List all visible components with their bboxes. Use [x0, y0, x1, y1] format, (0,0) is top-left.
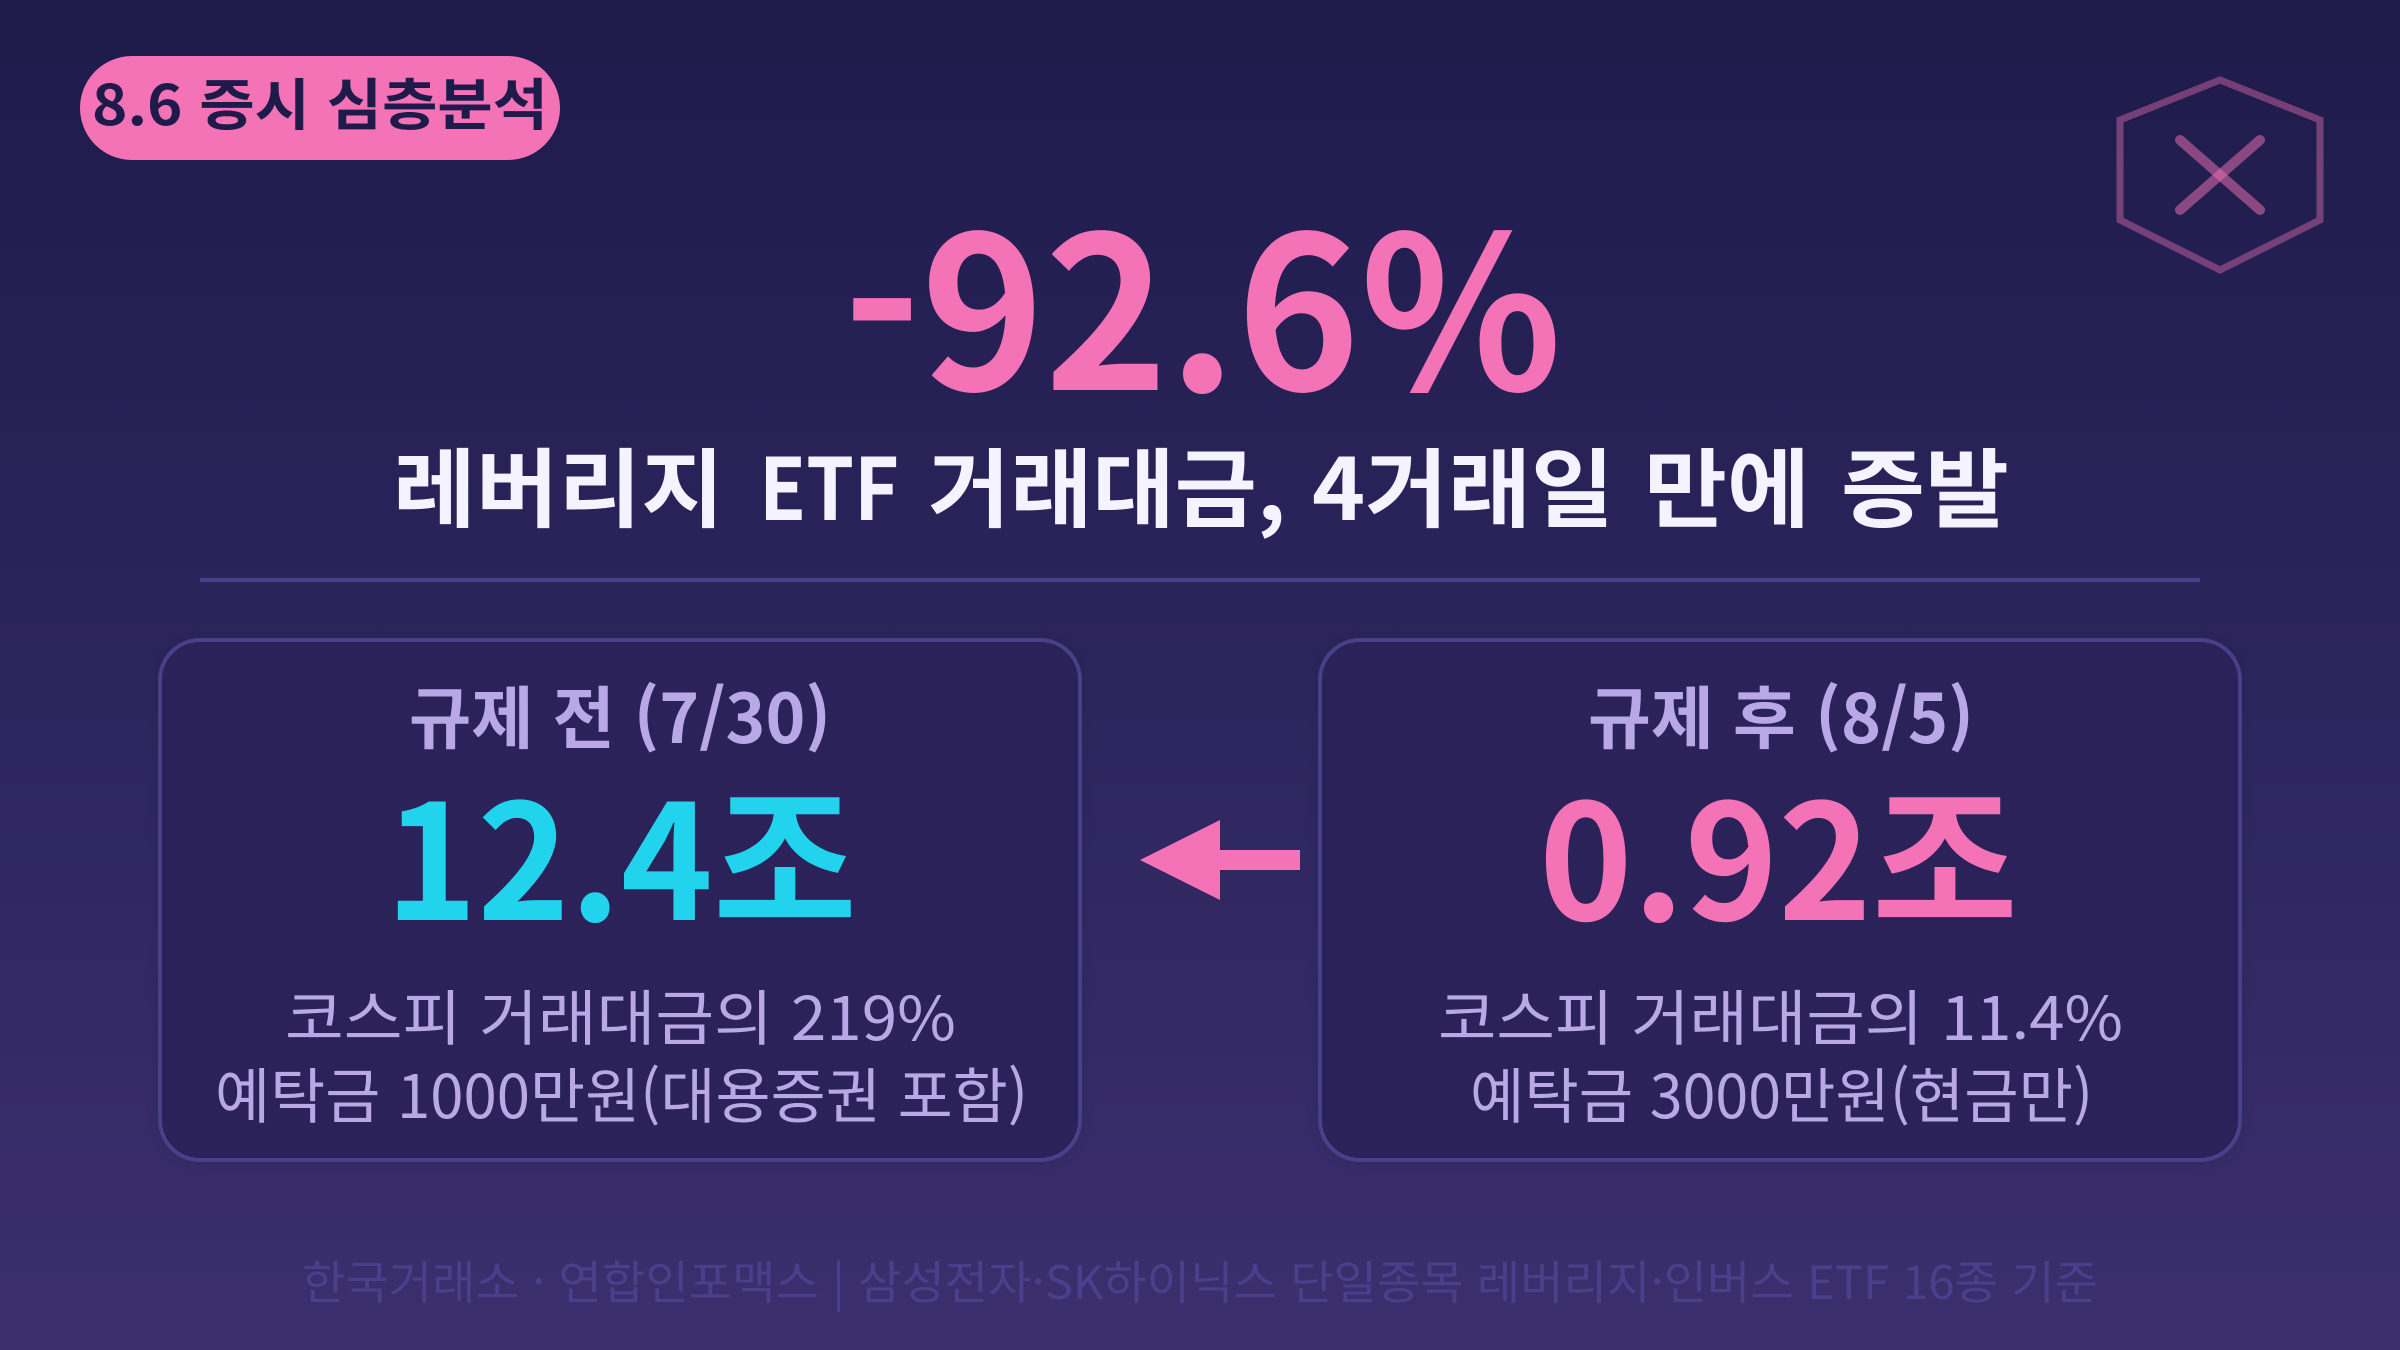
after deposit requirement: 예탁금 3000만원(현금만) — [1470, 1049, 2093, 1136]
source footnote: 한국거래소 · 연합인포맥스 | 삼성전자·SK하이닉스 단일종목 레버리지·인버스 ETF 16종 기준 — [302, 1247, 2098, 1313]
before share of KOSPI turnover: 코스피 거래대금의 219% — [285, 971, 956, 1058]
after share of KOSPI turnover: 코스피 거래대금의 11.4% — [1438, 971, 2123, 1058]
subtitle: ETF — [759, 420, 899, 545]
subtitle: 거래대금, — [928, 420, 1286, 545]
before heading: 규제 전 (7/30) — [409, 664, 831, 763]
panel: after regulation — [1320, 640, 2240, 1160]
subtitle: 증발 — [1841, 420, 2009, 545]
subtitle: 레버리지 — [393, 420, 724, 545]
after heading: 규제 후 (8/5) — [1588, 664, 1974, 763]
divider — [200, 578, 2200, 582]
before deposit requirement: 예탁금 1000만원(대용증권 포함) — [215, 1049, 1028, 1136]
headline number: -92.6% — [843, 145, 1562, 452]
subtitle — [393, 420, 2009, 545]
icon: hexagon with X — [2120, 80, 2320, 270]
arrow pointing left — [1140, 820, 1300, 900]
subtitle: 만에 — [1644, 420, 1810, 545]
before value: 12.4조 — [385, 735, 857, 967]
after value: 0.92조 — [1539, 735, 2018, 967]
panel: before regulation — [160, 640, 1080, 1160]
tag pill: 8.6 market analysis — [80, 56, 560, 160]
subtitle: 4거래일 — [1312, 420, 1614, 545]
tag pill: 8.6 market analysis: 8.6 증시 심층분석 — [92, 61, 548, 142]
